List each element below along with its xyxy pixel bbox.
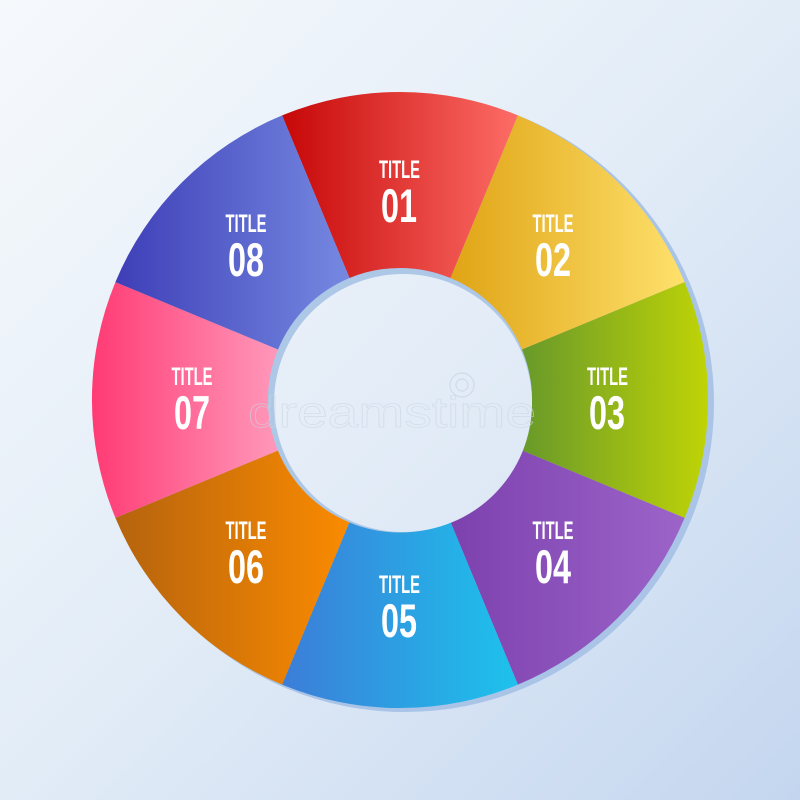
segment 06: 06 — [228, 540, 264, 593]
segment 07: 07 — [174, 386, 210, 439]
watermark text: dreamstime — [248, 388, 536, 437]
segment 08: TITLE — [226, 210, 266, 238]
segment 02: 02 — [535, 233, 571, 286]
segment 03: 03 — [589, 386, 625, 439]
center hole — [274, 274, 532, 532]
center hole rim — [268, 268, 532, 532]
segment 07 — [92, 282, 278, 518]
segment 01: 01 — [381, 179, 417, 232]
watermark logo — [450, 373, 474, 397]
segment 05: 05 — [381, 594, 417, 647]
segment 03 — [522, 282, 708, 518]
segment 05: TITLE — [379, 571, 420, 599]
segment 02: TITLE — [532, 210, 574, 238]
segment 01 — [282, 92, 518, 278]
segment 02 — [450, 115, 685, 350]
segment 04: 04 — [535, 540, 571, 593]
donut chart — [92, 92, 708, 708]
segment 01: TITLE — [379, 156, 420, 184]
segment 04: TITLE — [532, 517, 574, 545]
segment 08 — [115, 115, 350, 350]
segment 04 — [450, 450, 685, 685]
segment 05 — [282, 522, 518, 708]
segment 08: 08 — [228, 233, 264, 286]
segment 07: TITLE — [172, 363, 212, 391]
watermark — [248, 373, 536, 437]
segment 06: TITLE — [226, 517, 266, 545]
ring shadow — [96, 94, 714, 712]
segment 06 — [115, 450, 350, 685]
segment 03: TITLE — [587, 363, 628, 391]
